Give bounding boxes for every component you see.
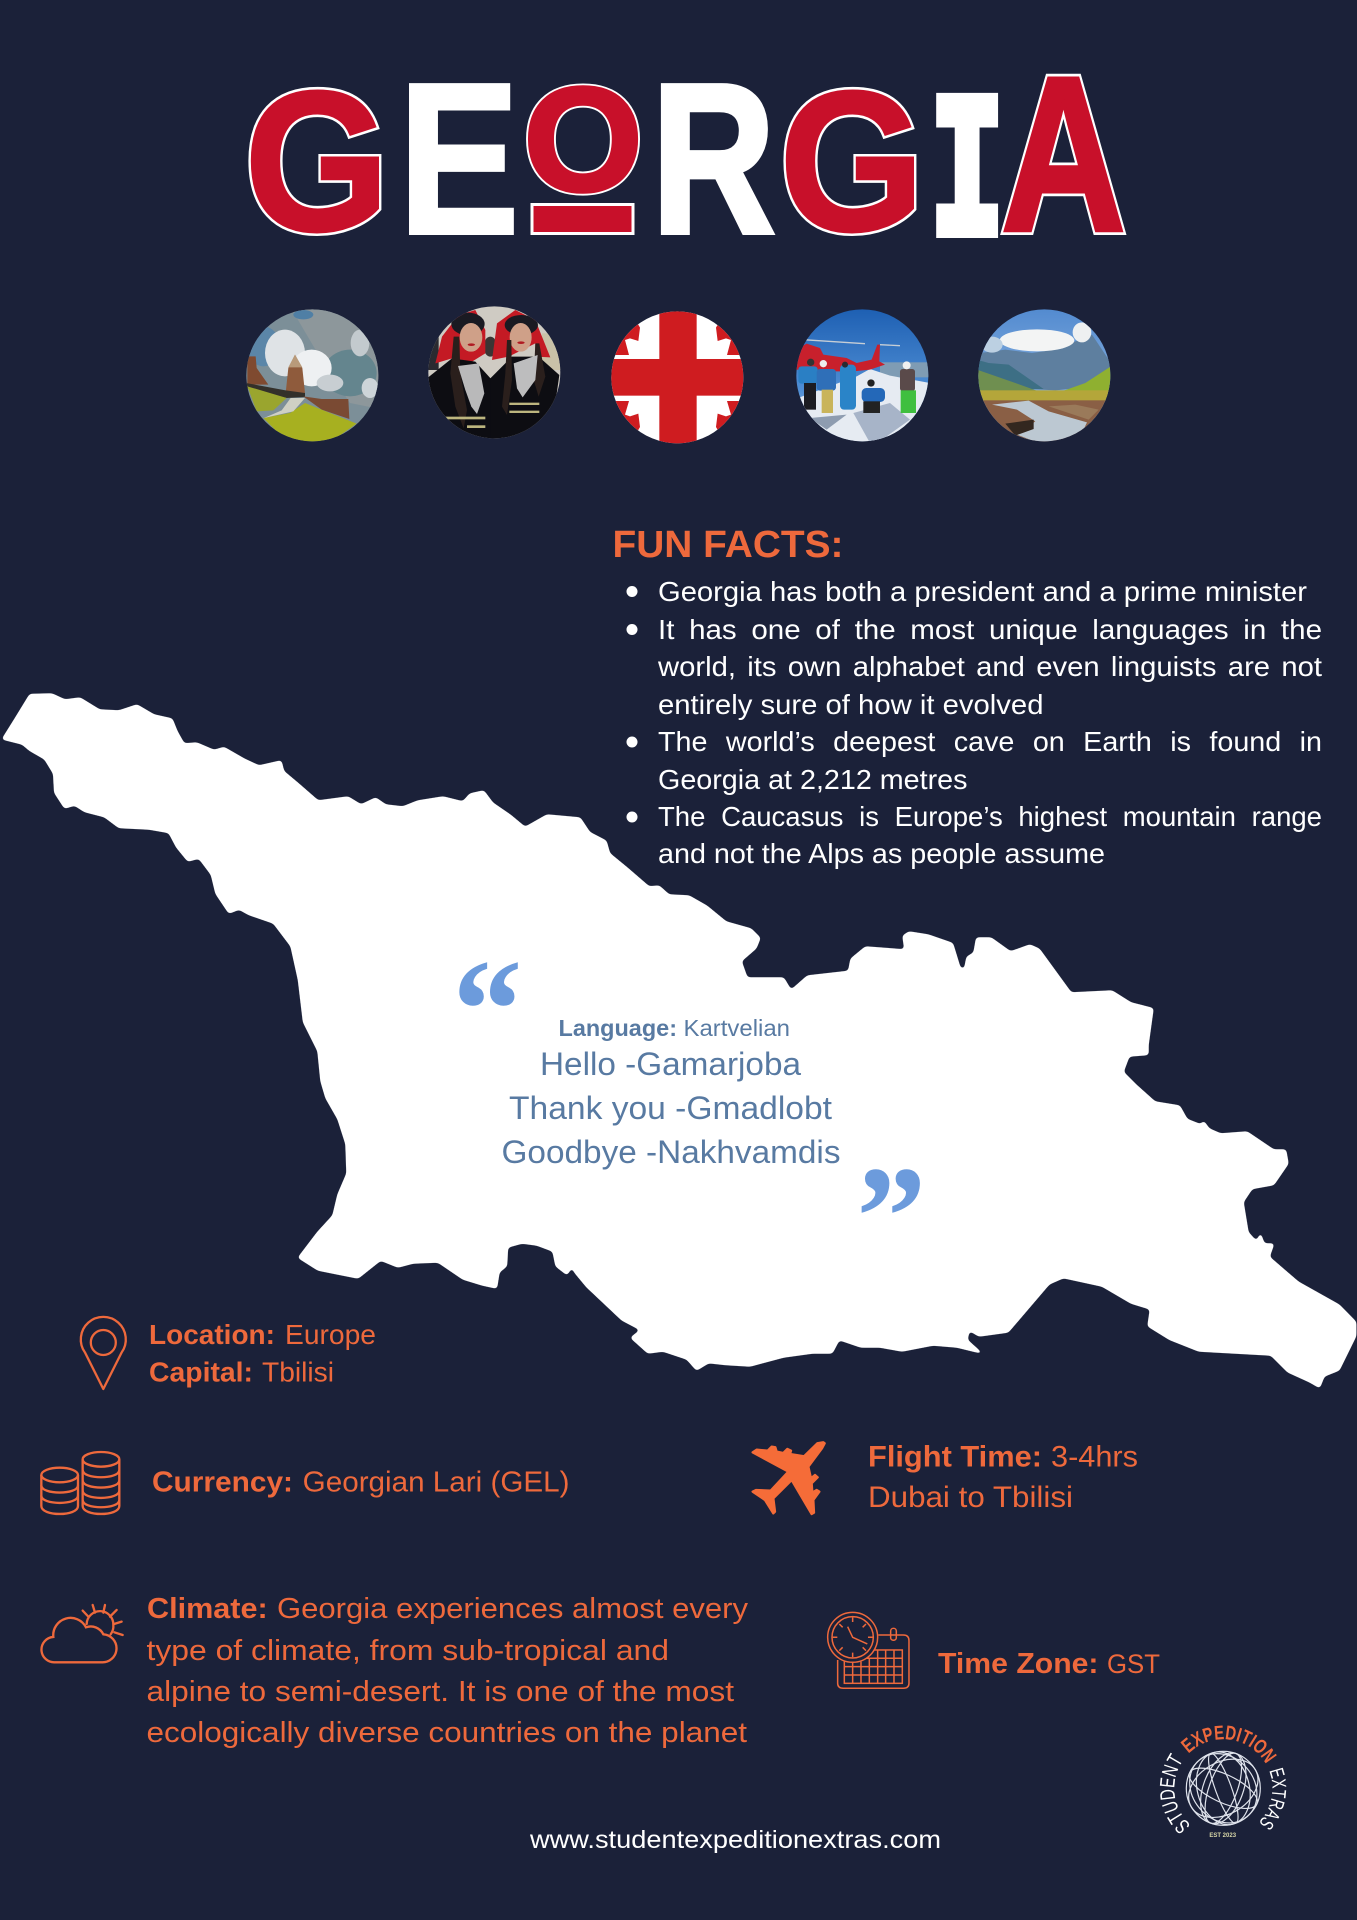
climate text	[146, 1593, 749, 1749]
bullet two: It has one of the most unique languages in the	[658, 614, 1322, 645]
letter G: G	[244, 49, 389, 273]
logo established year: EST 2023	[1209, 1833, 1237, 1839]
bullet two: entirely sure of how it evolved	[658, 689, 1044, 720]
flight time text: 3-4hrs	[1051, 1441, 1138, 1474]
bullet two	[626, 614, 1322, 720]
icon: clock and calendar	[828, 1612, 909, 1688]
letter A: A	[1001, 31, 1126, 277]
climate text: type of climate, from sub-tropical and	[146, 1635, 669, 1667]
bullet three: The world’s deepest cave on Earth is found in	[658, 726, 1322, 757]
location and capital text	[149, 1319, 376, 1388]
time zone text: Time Zone:	[938, 1648, 1098, 1680]
opening quote mark: “	[453, 930, 522, 1089]
logo: student expedition extras	[1160, 1726, 1286, 1839]
bullet one: Georgia has both a president and a prime minister	[658, 576, 1307, 607]
climate text: ecologically diverse countries on the planet	[146, 1717, 747, 1749]
letter O: O	[524, 57, 643, 222]
photo: helicopter and skiers	[796, 309, 928, 442]
photo: mountain valley	[978, 309, 1110, 442]
climate text: alpine to semi-desert. It is one of the most	[146, 1676, 734, 1708]
icon: airplane	[753, 1442, 825, 1514]
logo word extras: EXTRAS	[1260, 1768, 1286, 1830]
climate text: Georgia experiences almost every	[277, 1593, 749, 1625]
heading: fun facts: FUN FACTS:	[612, 524, 844, 566]
letter E: E	[398, 39, 520, 280]
closing quote mark: ”	[856, 1137, 926, 1296]
photo: Georgian flag	[611, 311, 744, 444]
map of Georgia	[2, 694, 1356, 1388]
time zone text: GST	[1107, 1649, 1160, 1679]
language text block	[502, 1015, 840, 1170]
location and capital text: Tbilisi	[262, 1357, 334, 1388]
bullet four: and not the Alps as people assume	[658, 838, 1105, 869]
icon: cloud and sun	[41, 1605, 123, 1662]
icon: location pin	[81, 1317, 126, 1389]
photo: mountain church	[246, 309, 378, 442]
bullet four: The Caucasus is Europe’s highest mountain range	[658, 801, 1322, 832]
underline of O	[532, 204, 633, 234]
bullet two: world, its own alphabet and even linguists are not	[657, 651, 1322, 682]
flight time text	[868, 1441, 1138, 1514]
website url: www.studentexpeditionextras.com	[529, 1826, 941, 1854]
logo word student: STUDENT	[1160, 1752, 1189, 1834]
currency text	[152, 1467, 570, 1499]
climate text: Climate:	[147, 1593, 268, 1625]
logo globe	[1176, 1740, 1271, 1837]
bullet four	[626, 801, 1322, 869]
language text block: Kartvelian	[684, 1015, 790, 1041]
letter O: O	[524, 57, 643, 222]
logo word expedition: EXPEDITION	[1180, 1726, 1277, 1764]
location and capital text: Europe	[285, 1319, 376, 1350]
title	[244, 31, 1126, 294]
letter G: G	[244, 49, 389, 273]
time zone text	[938, 1648, 1160, 1680]
photo: women in traditional dress	[428, 306, 560, 438]
flight time text: Dubai to Tbilisi	[868, 1481, 1073, 1514]
letter R: R	[652, 39, 775, 278]
language text block: Language:	[558, 1015, 677, 1041]
letter G second: G	[779, 49, 924, 273]
bullet three: Georgia at 2,212 metres	[658, 764, 968, 795]
location and capital text: Location:	[149, 1319, 275, 1350]
currency text: Georgian Lari (GEL)	[303, 1467, 570, 1499]
fun facts list	[626, 576, 1322, 869]
language text block: Goodbye -Nakhvamdis	[502, 1134, 840, 1170]
flight time text: Flight Time:	[868, 1441, 1042, 1474]
language text block: Hello -Gamarjoba	[540, 1046, 801, 1082]
location and capital text: Capital:	[149, 1357, 253, 1388]
letter I: I	[930, 65, 1004, 294]
icon: coins	[41, 1452, 119, 1514]
bullet three	[626, 726, 1322, 795]
letter G second: G	[779, 49, 924, 273]
language text block: Thank you -Gmadlobt	[509, 1090, 832, 1126]
letter A: A	[1001, 31, 1126, 277]
currency text: Currency:	[152, 1467, 293, 1499]
